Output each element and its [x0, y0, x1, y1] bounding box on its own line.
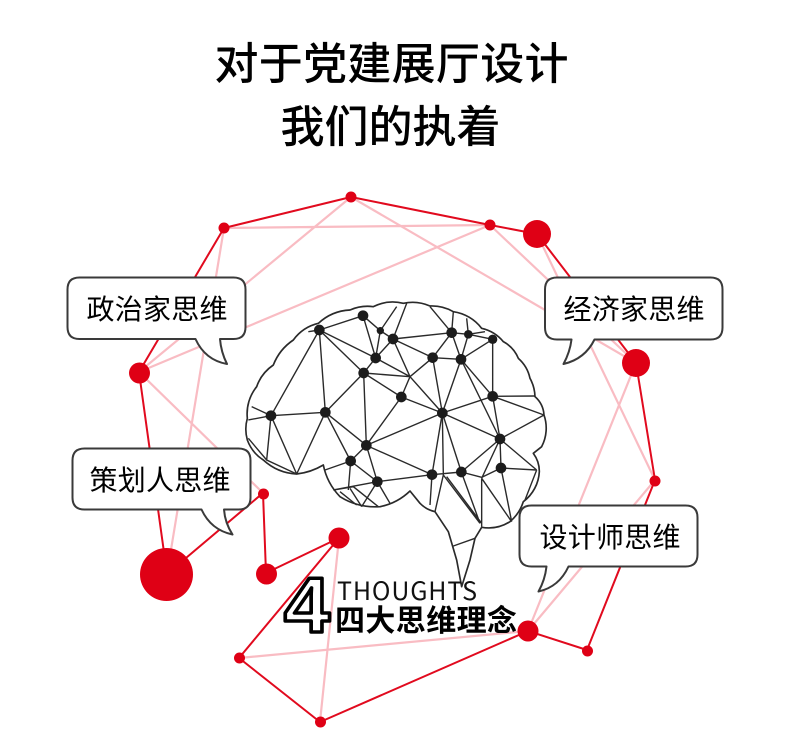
network: red nodes — [129, 192, 660, 728]
network: red links — [139, 197, 655, 722]
title — [214, 40, 568, 152]
subtitle: THOUGHTS: THOUGHTS — [337, 572, 477, 608]
speech bubble: designer thinking: 设计师思维 — [540, 522, 680, 553]
speech bubble: planner thinking: 策划人思维 — [90, 465, 230, 496]
speech bubble: planner thinking — [72, 448, 250, 534]
network: pink background links — [139, 197, 655, 722]
speech bubble: politician thinking — [68, 278, 246, 364]
speech bubble: economist thinking — [545, 278, 722, 364]
big outlined numeral 4: 4 — [284, 561, 330, 649]
brain mesh lines — [248, 303, 544, 546]
title: 对于党建展厅设计 — [214, 40, 568, 89]
title: 我们的执着 — [280, 103, 500, 152]
brain outline — [246, 302, 546, 587]
speech bubble: politician thinking: 政治家思维 — [86, 294, 228, 325]
brain illustration — [246, 302, 546, 587]
speech bubble: economist thinking: 经济家思维 — [564, 294, 704, 325]
speech bubble: designer thinking — [520, 506, 698, 592]
subtitle: four thinking concepts: 四大思维理念 — [335, 604, 517, 638]
brain mesh nodes — [266, 310, 506, 487]
